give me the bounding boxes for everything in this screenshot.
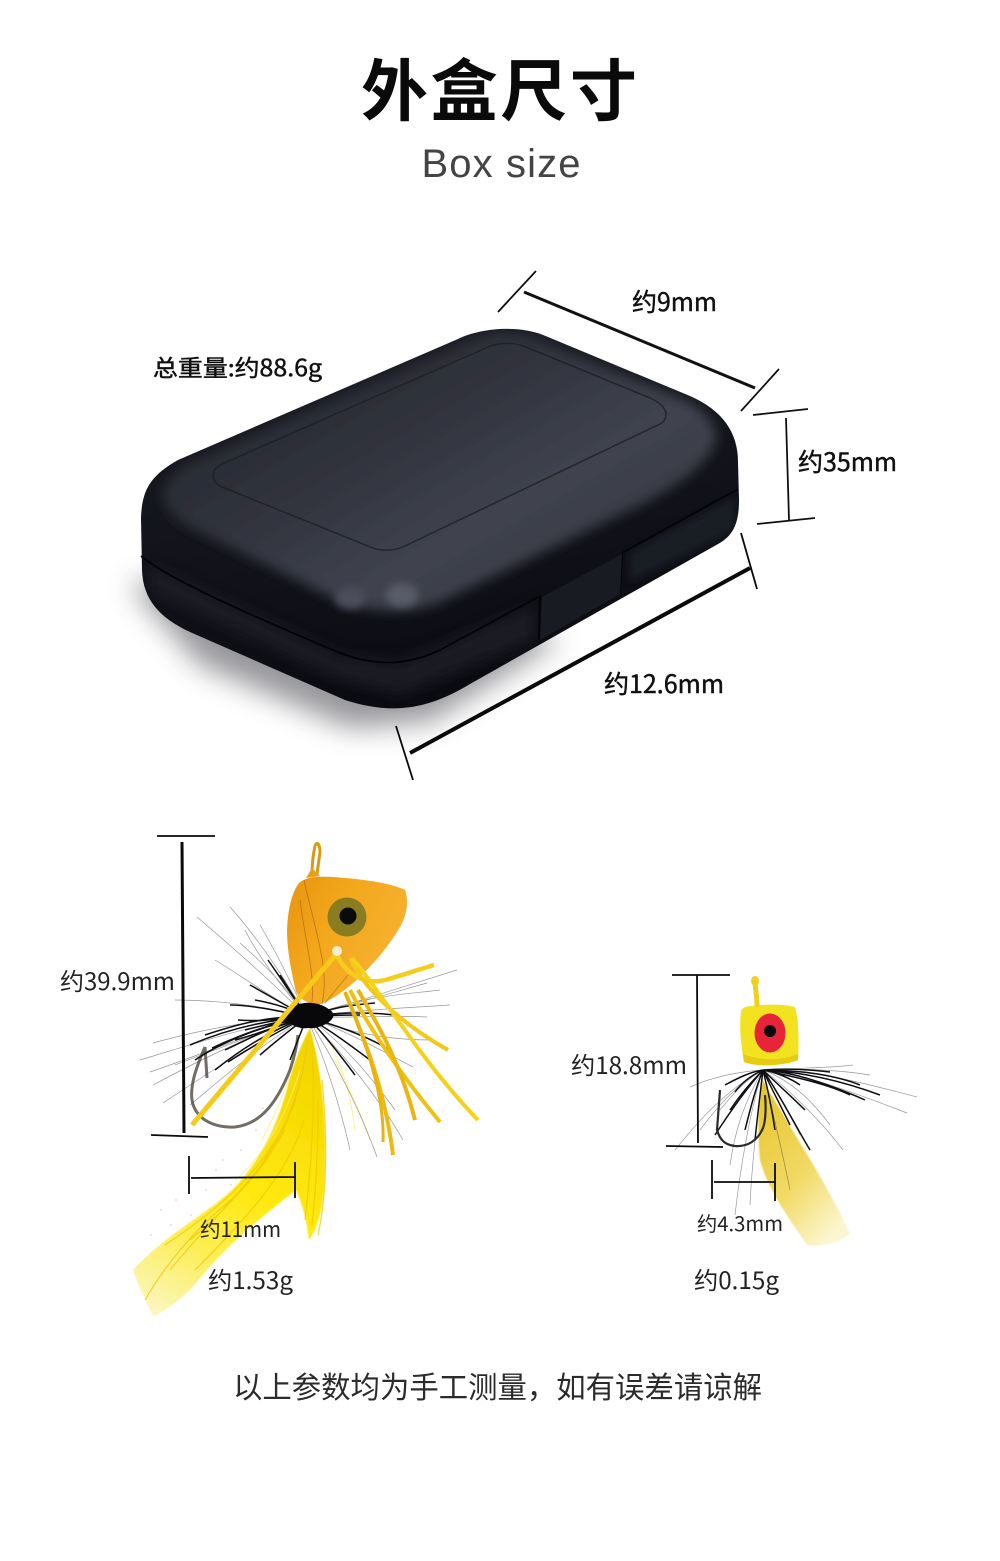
large fly rubber legs bbox=[192, 951, 478, 1155]
box lid seam bbox=[141, 489, 738, 663]
dimension: box height 35mm bbox=[753, 409, 815, 524]
large fly tie bbox=[332, 946, 342, 956]
subtitle: Box size bbox=[422, 142, 580, 186]
label: 11mm: 约11mm bbox=[200, 1214, 281, 1244]
large fly head streaks bbox=[300, 880, 348, 1004]
large fly feather bbox=[133, 1028, 325, 1316]
small fly faint hairs bbox=[675, 1065, 917, 1215]
box clasp bbox=[540, 554, 622, 640]
box top panel outline bbox=[213, 343, 666, 550]
box top face bbox=[163, 333, 716, 611]
dimension: large fly hook gap bbox=[189, 1156, 295, 1198]
label: 12.6mm: 约12.6mm bbox=[604, 665, 724, 701]
label: 4.3mm: 约4.3mm bbox=[697, 1208, 783, 1237]
dimension: small fly hook gap bbox=[712, 1160, 775, 1201]
box corner highlights bbox=[335, 587, 365, 609]
product photo: small yellow popper fly bbox=[675, 976, 917, 1246]
large fly hook bbox=[192, 1035, 298, 1127]
box lower sheen bbox=[152, 576, 534, 692]
large fly eye bbox=[328, 898, 366, 936]
label: 39.9mm: 约39.9mm bbox=[60, 962, 175, 997]
box shadow bbox=[130, 560, 560, 728]
dimension: box length 12.6mm bbox=[396, 533, 757, 780]
dimension: box width 9mm bbox=[498, 271, 779, 411]
box body bbox=[141, 329, 739, 708]
small fly head bbox=[740, 1005, 799, 1065]
label: 18.8mm: 约18.8mm bbox=[571, 1046, 687, 1081]
large fly feather barbs bbox=[145, 1040, 326, 1300]
small fly hook bbox=[717, 1090, 766, 1146]
large fly knot bbox=[287, 1003, 333, 1028]
dimension: large fly length bbox=[151, 836, 215, 1137]
large fly feather sparkle bbox=[150, 1108, 264, 1235]
small fly eye bbox=[754, 1014, 786, 1052]
dimension: small fly length bbox=[666, 975, 730, 1147]
title: 外盒尺寸 bbox=[361, 38, 637, 135]
label: 0.15g: 约0.15g bbox=[694, 1261, 779, 1296]
label: 35mm: 约35mm bbox=[798, 443, 897, 479]
footnote: 以上参数均为手工测量，如有误差请谅解 bbox=[233, 1363, 762, 1407]
product photo: large orange popper fly bbox=[133, 843, 478, 1316]
label: 1.53g: 约1.53g bbox=[208, 1261, 293, 1296]
large fly black hackle bbox=[190, 960, 395, 1075]
label: 9mm: 约9mm bbox=[632, 283, 717, 319]
product photo: black box bbox=[130, 329, 739, 728]
large fly eyelet bbox=[312, 843, 320, 875]
large fly faint hackle hairs bbox=[140, 907, 457, 1157]
small fly head shading bbox=[743, 1054, 798, 1065]
large fly head bbox=[287, 877, 407, 1005]
label: total weight: 总重量:约88.6g bbox=[153, 349, 322, 383]
small fly feather bbox=[758, 1080, 850, 1246]
small fly eyelet bbox=[755, 980, 757, 1005]
small fly black hackle bbox=[715, 1069, 880, 1150]
